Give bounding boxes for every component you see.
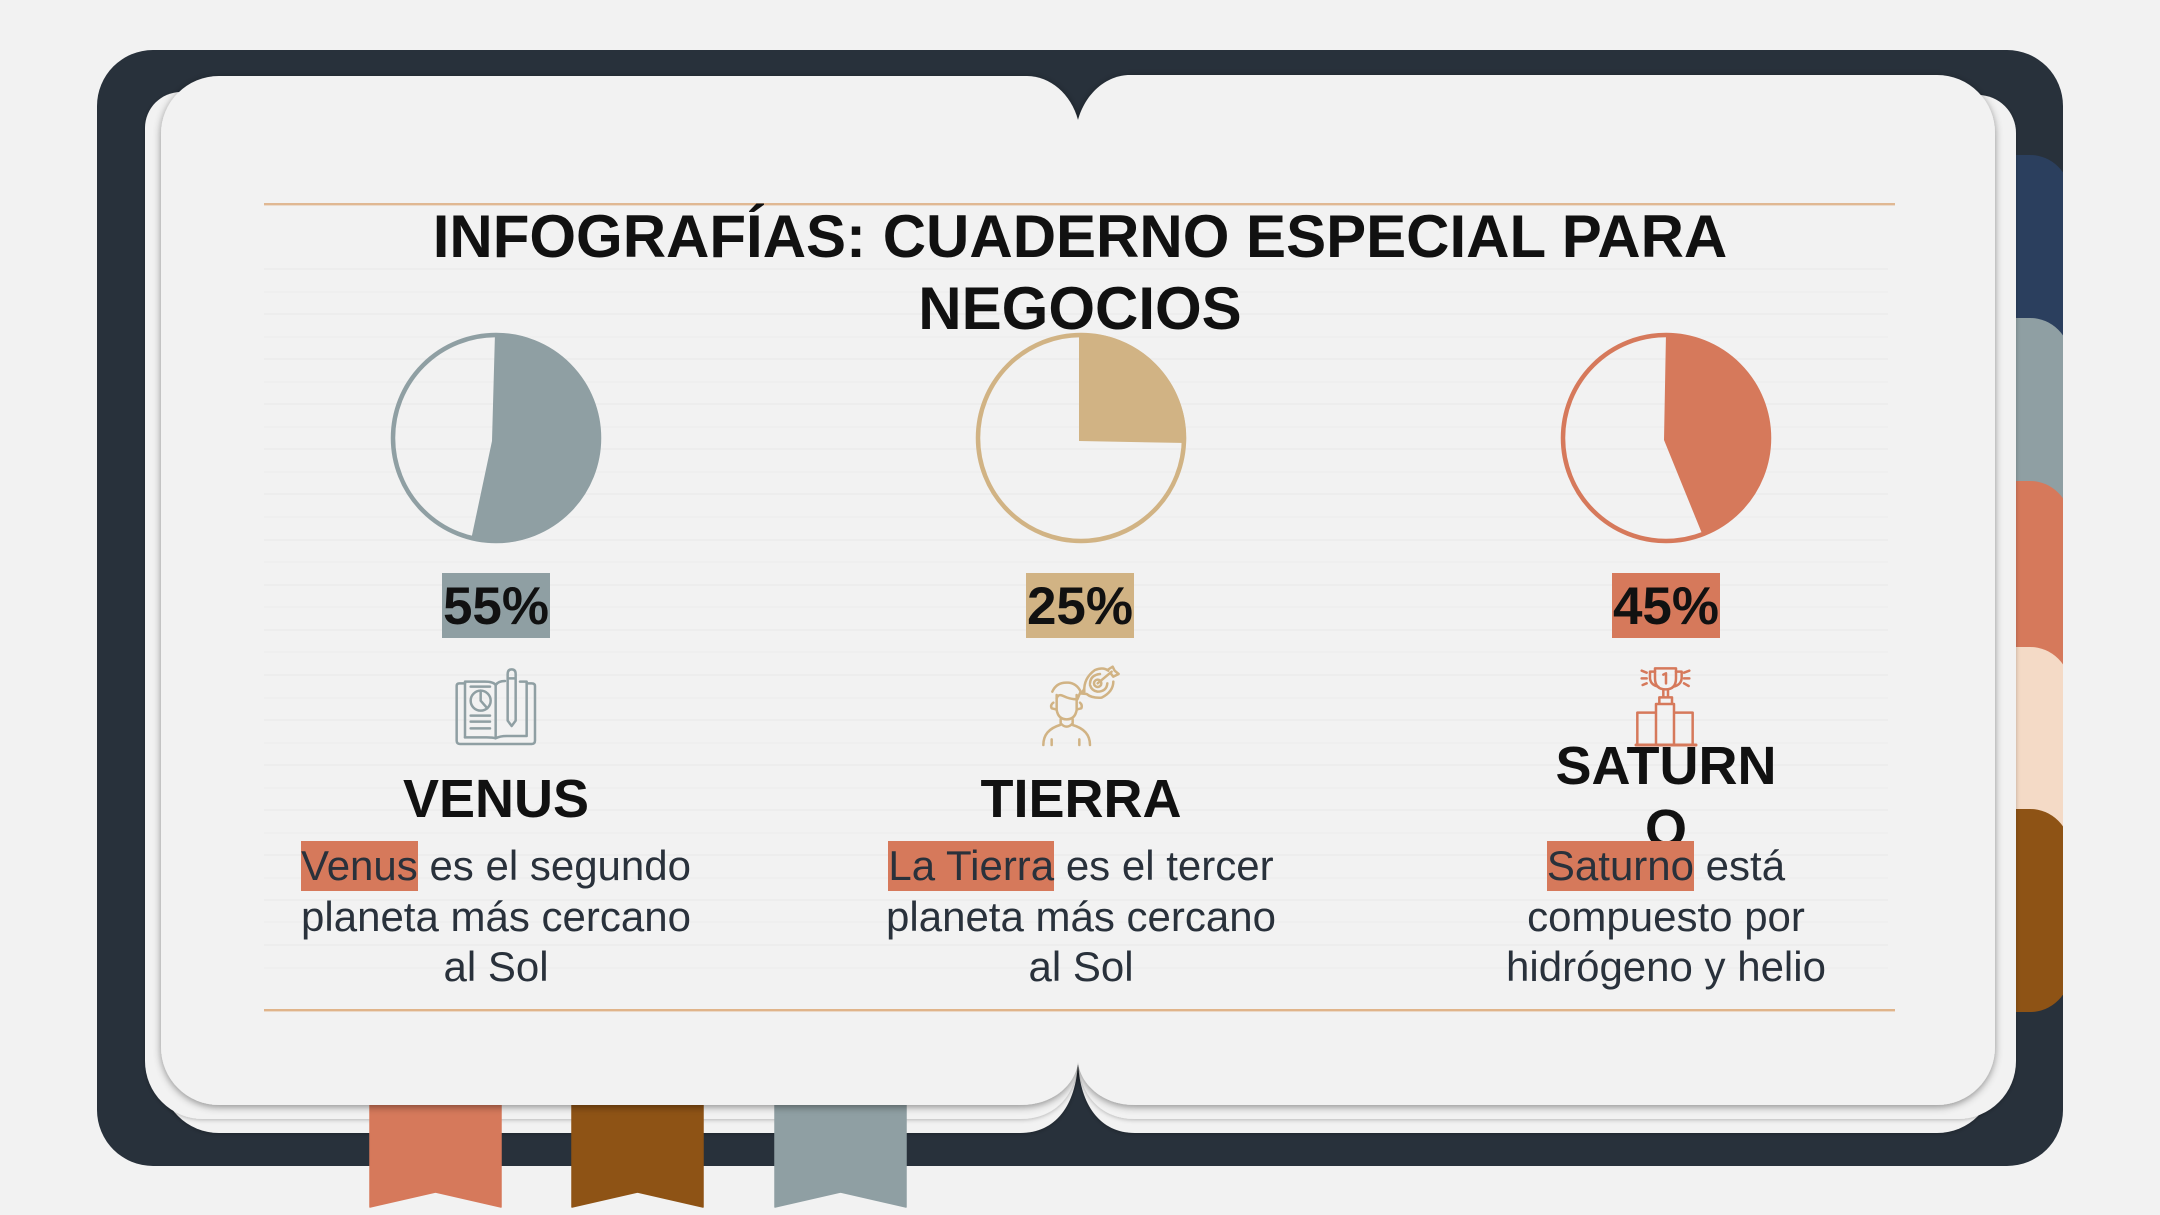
pie chart: Tierra 25% xyxy=(978,333,1186,541)
tab: grey xyxy=(2016,318,2063,498)
tab: brown xyxy=(2016,809,2063,1012)
front page spread xyxy=(161,75,1995,1105)
ribbon: coral xyxy=(370,1095,501,1207)
heading: Venus: VENUS xyxy=(403,769,589,829)
text: Tierra xyxy=(886,841,1276,990)
text: Saturno: Saturno está xyxy=(1547,842,1785,889)
right page xyxy=(1078,75,1995,1105)
percentage: Saturno: 45% xyxy=(1613,577,1719,636)
text: Tierra: La Tierra es el tercer xyxy=(888,842,1274,889)
tab: navy xyxy=(2016,155,2063,336)
text: Venus: planeta más cercano xyxy=(301,893,691,940)
percentage: Venus: 55% xyxy=(443,577,549,636)
text: Saturno xyxy=(1506,841,1826,990)
ribbon: brown xyxy=(572,1095,703,1207)
tab: coral xyxy=(2016,481,2063,664)
title: INFOGRAFÍAS: CUADERNO ESPECIAL PARA xyxy=(433,203,1727,270)
middle page layer xyxy=(145,92,2016,1119)
icon: person with target xyxy=(1043,667,1119,745)
percentage: Tierra: 25% xyxy=(1027,577,1133,636)
heading: Saturno xyxy=(1556,736,1776,859)
pie chart: Venus 55% xyxy=(393,333,601,543)
lowest page layer xyxy=(161,112,1995,1133)
text: Venus xyxy=(301,841,691,990)
text: Venus: Venus es el segundo xyxy=(301,842,691,889)
text: Venus: al Sol xyxy=(443,943,549,990)
bottom rule xyxy=(264,1009,1895,1011)
text: Tierra: al Sol xyxy=(1028,943,1134,990)
title: NEGOCIOS xyxy=(918,275,1242,342)
tab: peach xyxy=(2016,647,2063,826)
bookmark ribbons xyxy=(370,1095,906,1207)
pie chart: Saturno 45% xyxy=(1563,333,1770,541)
title xyxy=(433,203,1727,342)
ruled notebook lines xyxy=(264,269,1888,968)
icon: trophy on podium xyxy=(1636,668,1696,745)
left page xyxy=(161,76,1078,1105)
top rule xyxy=(264,203,1895,205)
icon: open book with chart and pen xyxy=(457,669,535,744)
text: Tierra: planeta más cercano xyxy=(886,893,1276,940)
index tabs xyxy=(2016,155,2063,1012)
ribbon: grey xyxy=(775,1095,906,1207)
text: Saturno: compuesto por xyxy=(1527,893,1805,940)
text: Saturno: hidrógeno y helio xyxy=(1506,943,1826,990)
heading: Saturno: SATURN xyxy=(1556,736,1776,796)
heading: Tierra: TIERRA xyxy=(980,769,1182,829)
heading: Saturno: O xyxy=(1645,799,1687,859)
